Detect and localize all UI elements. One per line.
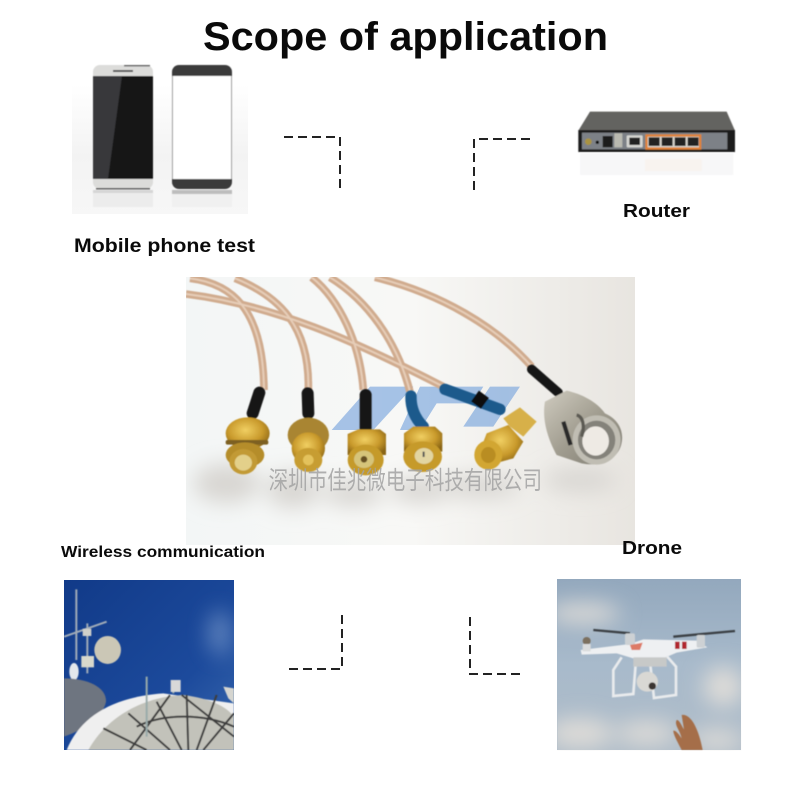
dashed connector: bottom right bbox=[470, 617, 524, 674]
label: mobile phone test: Mobile phone test bbox=[74, 236, 256, 257]
label: router: Router bbox=[623, 201, 690, 221]
cables bbox=[186, 277, 532, 392]
photo: satellite dishes bbox=[64, 580, 234, 750]
sky clouds bbox=[547, 603, 743, 750]
SMA connector 2 bbox=[288, 418, 329, 472]
dashed connector: top right bbox=[474, 139, 530, 195]
watermark logo bbox=[332, 387, 520, 430]
big white dish bbox=[67, 677, 234, 750]
icon: black phone bbox=[93, 65, 153, 190]
title: Scope of application bbox=[203, 15, 608, 59]
blue sleeves bbox=[411, 389, 500, 427]
photo shadows bbox=[193, 463, 617, 508]
dashed connector: bottom left bbox=[285, 615, 342, 669]
icon: white phone bbox=[172, 65, 232, 189]
router reflection bbox=[580, 153, 733, 175]
hand bbox=[673, 715, 703, 750]
photo: coaxial cable connectors bbox=[186, 277, 635, 545]
left mesh dish bbox=[64, 678, 106, 737]
heat-shrink sleeves bbox=[253, 369, 558, 430]
right-angle SMA connector bbox=[474, 407, 537, 470]
label: wireless communication: Wireless communication bbox=[61, 544, 265, 561]
watermark: company name: 深圳市佳兆微电子科技有限公司 bbox=[269, 467, 542, 495]
infographic canvas bbox=[61, 21, 742, 750]
phone reflections bbox=[93, 190, 232, 207]
BNC connector bbox=[544, 391, 622, 465]
mast and antennas bbox=[64, 589, 121, 680]
photo: drone bbox=[547, 579, 743, 750]
dashed connector: top left bbox=[284, 137, 340, 192]
orange LAN ports bbox=[645, 134, 701, 150]
router top bbox=[578, 112, 735, 131]
sky cloud wisps bbox=[208, 610, 232, 657]
SMA connector 1 bbox=[226, 417, 270, 474]
SMA connector 4 bbox=[403, 427, 442, 472]
drone body bbox=[581, 630, 735, 698]
image: router bbox=[578, 112, 735, 175]
image: mobile phones bbox=[72, 65, 248, 214]
label: drone: Drone bbox=[622, 538, 682, 558]
router front bbox=[578, 130, 735, 152]
SMA connector 3 bbox=[348, 429, 386, 475]
